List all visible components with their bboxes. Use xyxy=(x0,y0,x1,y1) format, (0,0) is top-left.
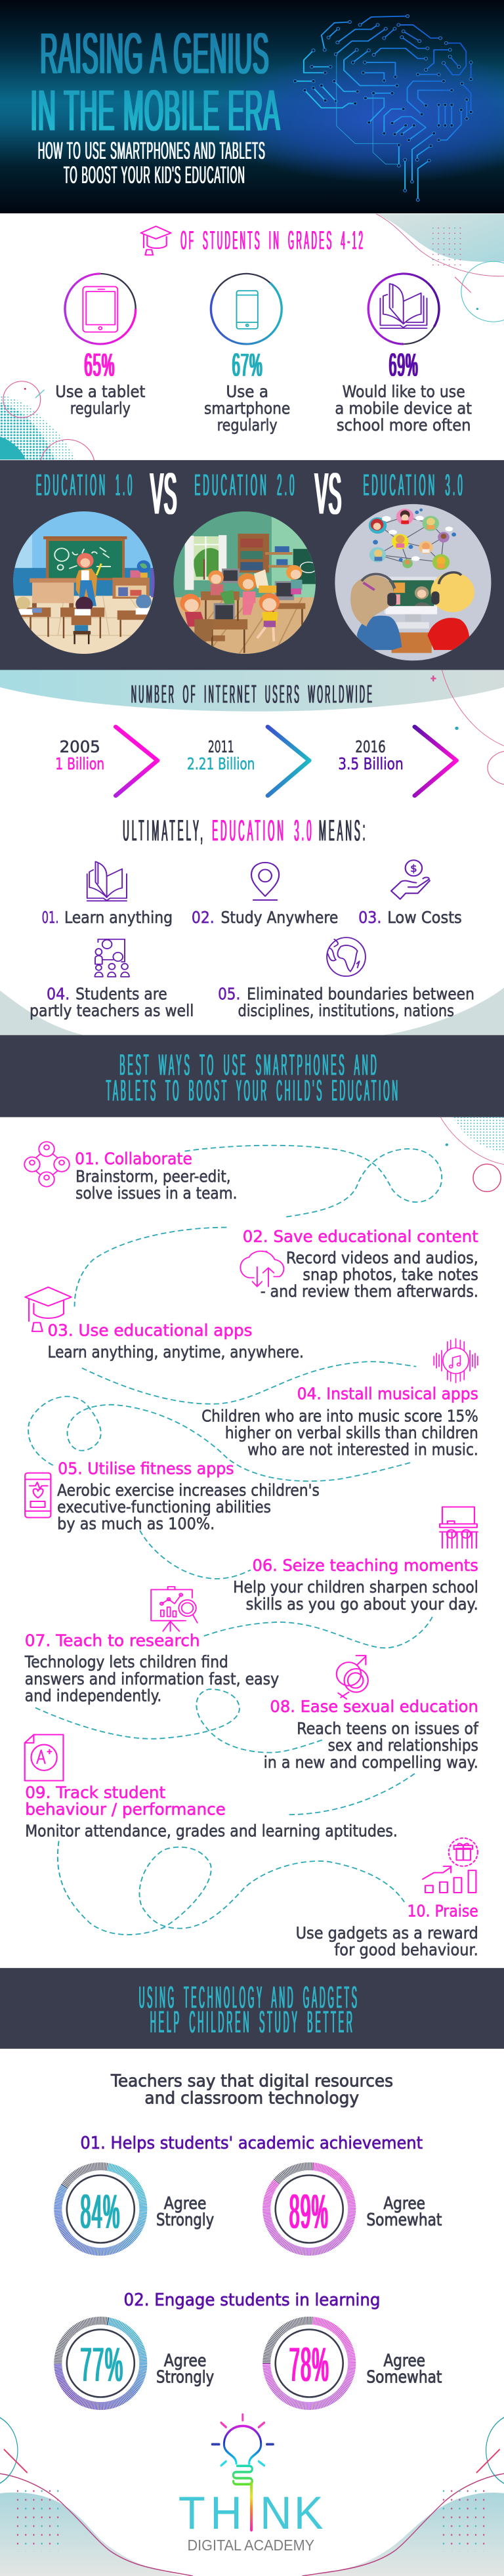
logo: think digital academy: THINK xyxy=(178,2487,324,2539)
panel: teachers survey: 78% xyxy=(289,2337,329,2392)
stat: mobile device 69% xyxy=(335,274,472,435)
stat: smartphone 67%: smartphone xyxy=(204,399,290,418)
stat: 2016: 3.5 Billion xyxy=(338,755,404,774)
panel: number of internet users: MEANS: xyxy=(319,814,368,848)
stat: 2011: 2011 xyxy=(208,738,234,757)
item 04: install musical apps: 04. Install musical apps xyxy=(297,1385,478,1404)
panel: teachers survey xyxy=(80,2071,442,2392)
value: 77%: 77% xyxy=(80,2337,124,2392)
heading: education 1.0 vs 2.0 vs 3.0 xyxy=(36,462,465,526)
stat: tablet 65%: 65% xyxy=(84,347,115,383)
icon: circuit brain xyxy=(295,16,471,200)
item: students are teachers: Students are xyxy=(75,985,167,1004)
item 09: track student behaviour: Monitor attendance, grades and learning aptitudes. xyxy=(25,1822,398,1841)
dashed path connectors xyxy=(28,1146,442,1481)
item 08: ease sexual education xyxy=(264,1656,478,1772)
item 03: use educational apps: 03. Use educational apps xyxy=(47,1321,252,1340)
stat: mobile device 69%: a mobile device at xyxy=(335,399,472,418)
item 09: track student behaviour: behaviour / performance xyxy=(25,1800,226,1819)
title xyxy=(31,21,280,143)
icon: cloud sync xyxy=(240,1251,284,1287)
item 06: seize teaching moments xyxy=(233,1507,478,1614)
icon: smartphone xyxy=(236,291,258,329)
heading: education 1.0 vs 2.0 vs 3.0: VS xyxy=(315,462,342,526)
item 10: praise: 10. Praise xyxy=(408,1902,478,1921)
labels: agree strongly 84 xyxy=(156,2193,214,2229)
item: students are teachers xyxy=(30,939,194,1021)
text: teachers say: and classroom technology xyxy=(144,2088,359,2108)
item: eliminated boundaries: 05. xyxy=(218,985,240,1004)
heading: best ways xyxy=(106,1048,400,1107)
item 07: teach to research: Technology lets children find xyxy=(24,1653,228,1672)
item 02: save educational content xyxy=(240,1228,478,1301)
item: eliminated boundaries xyxy=(218,937,474,1021)
stat: mobile device 69%: school more often xyxy=(337,416,471,435)
heading: academic achievement: 01. Helps students' academic achievement xyxy=(80,2133,423,2153)
panel: teachers survey: 89% xyxy=(289,2185,329,2239)
arrow: chevron 2 xyxy=(268,727,309,796)
item 01: collaborate: Brainstorm, peer-edit, xyxy=(75,1168,231,1186)
item: study anywhere: 02. xyxy=(192,909,215,928)
stat: 2005 xyxy=(55,738,104,774)
subtitle xyxy=(38,138,266,189)
stat: 2011 xyxy=(187,738,255,774)
icon: graduation cap xyxy=(141,226,171,255)
ring: 77 percent xyxy=(58,2321,143,2406)
labels: agree strongly 77 xyxy=(156,2350,214,2387)
item 01: collaborate: solve issues in a team. xyxy=(75,1184,237,1203)
text: teachers say: Teachers say that digital resources xyxy=(110,2071,393,2091)
item: students are teachers: partly teachers as well xyxy=(30,1002,194,1021)
icon: classroom board xyxy=(440,1507,478,1548)
icon: gift and growth chart xyxy=(423,1838,478,1893)
ring: 78 percent xyxy=(266,2321,352,2406)
icon: open book xyxy=(380,284,427,328)
labels: agree somewhat 89: Agree xyxy=(383,2193,425,2214)
panel: students in grades 4-12 xyxy=(0,214,504,492)
item 03: use educational apps xyxy=(25,1287,304,1362)
stat: 2005: 1 Billion xyxy=(55,755,104,774)
item 09: track student behaviour xyxy=(25,1734,398,1841)
heading: ultimately, education 3.0 means: ULTIMATELY, xyxy=(123,814,205,848)
item 05: utilise fitness apps: by as much as 100%. xyxy=(57,1515,215,1534)
item: study anywhere: Study Anywhere xyxy=(220,909,338,928)
labels: agree strongly 84: Agree xyxy=(164,2193,206,2214)
panel: number of internet users xyxy=(0,670,504,1035)
illustration: computer classroom xyxy=(173,509,319,656)
labels: agree strongly 77: Agree xyxy=(164,2350,206,2371)
item 09: track student behaviour: 09. Track student xyxy=(25,1784,165,1802)
item: low costs: $ xyxy=(410,863,417,874)
item 08: ease sexual education: 08. Ease sexual education xyxy=(270,1698,478,1717)
item 07: teach to research xyxy=(24,1587,279,1706)
labels: agree strongly 84: Strongly xyxy=(156,2209,214,2229)
labels: agree somewhat 78: Agree xyxy=(383,2350,425,2371)
stat: tablet 65%: Use a tablet xyxy=(55,383,145,402)
illustration: online learning network xyxy=(334,504,492,662)
item 07: teach to research: answers and information fast, easy xyxy=(25,1670,279,1689)
panel: technology heading band xyxy=(0,1968,504,2049)
stat: smartphone 67%: 67% xyxy=(232,347,263,383)
icon: collaboration circle xyxy=(24,1142,70,1187)
item: learn anything xyxy=(42,861,173,928)
item 05: utilise fitness apps: 05. Utilise fitness apps xyxy=(58,1460,234,1478)
labels: agree somewhat 78 xyxy=(366,2350,442,2387)
stat: tablet 65%: regularly xyxy=(70,399,131,418)
item 04: install musical apps xyxy=(201,1339,478,1459)
logo: think digital academy: DIGITAL ACADEMY xyxy=(188,2537,314,2554)
icon: hand with coin xyxy=(391,860,430,899)
item: low costs xyxy=(358,860,462,928)
icon: map pin xyxy=(251,863,279,900)
stat: tablet 65% xyxy=(55,274,145,418)
icon: research chart xyxy=(151,1587,198,1631)
labels: agree strongly 77: Strongly xyxy=(156,2367,214,2387)
item 10: praise xyxy=(296,1838,478,1960)
stat: 2005: 2005 xyxy=(60,738,100,757)
icon: A+ paper xyxy=(25,1734,63,1780)
panel: ten best ways part one xyxy=(24,1117,504,1534)
item: learn anything: Learn anything xyxy=(64,909,173,928)
stat: mobile device 69%: Would like to use xyxy=(343,383,465,402)
item 03: use educational apps: Learn anything, anytime, anywhere. xyxy=(47,1343,304,1362)
text: teachers say xyxy=(110,2071,393,2108)
heading: using technology and gadgets xyxy=(139,1981,360,2040)
stat: 2016 xyxy=(338,738,404,774)
arrow: chevron 1 xyxy=(116,727,158,796)
stat: mobile device 69%: 69% xyxy=(389,347,419,383)
item 01: collaborate xyxy=(24,1142,237,1203)
icon: light bulb xyxy=(212,2415,273,2530)
icon: music wave xyxy=(434,1339,478,1383)
item: learn anything: 01. xyxy=(42,909,59,928)
item 05: utilise fitness apps: executive-functioning abilities xyxy=(57,1498,271,1517)
labels: agree somewhat 78: Somewhat xyxy=(366,2367,442,2387)
item 01: collaborate: 01. Collaborate xyxy=(75,1150,192,1169)
item 07: teach to research: and independently. xyxy=(25,1687,161,1706)
item 07: teach to research: 07. Teach to research xyxy=(25,1632,200,1650)
icon: globe xyxy=(327,937,366,976)
logo: think digital academy xyxy=(178,2415,324,2554)
heading: education 1.0 vs 2.0 vs 3.0: VS xyxy=(150,462,177,526)
illustration: traditional classroom xyxy=(13,509,158,657)
icon: teacher and students xyxy=(94,939,129,977)
labels: agree somewhat 89: Somewhat xyxy=(366,2209,442,2229)
icon: gender symbols xyxy=(337,1656,368,1699)
dashed path connectors xyxy=(35,1530,432,1935)
labels: agree somewhat 89 xyxy=(366,2193,442,2229)
stat: 2016: 2016 xyxy=(355,738,386,757)
stat: 2011: 2.21 Billion xyxy=(187,755,255,774)
icon: tablet xyxy=(83,287,117,332)
item 05: utilise fitness apps xyxy=(25,1460,320,1534)
icon: open book xyxy=(87,861,127,901)
stat: smartphone 67%: regularly xyxy=(217,416,278,435)
item 02: save educational content: 02. Save educational content xyxy=(243,1228,478,1247)
panel: best ways heading band xyxy=(0,1035,504,1117)
item 06: seize teaching moments: 06. Seize teaching moments xyxy=(252,1556,478,1576)
stat: smartphone 67%: Use a xyxy=(226,383,268,402)
item: low costs: Low Costs xyxy=(387,909,462,928)
header panel xyxy=(0,0,504,213)
panel: ten best ways part two xyxy=(24,1507,478,1960)
arrow: chevron 3 xyxy=(415,727,457,796)
ring: 84 percent xyxy=(58,2166,143,2252)
item: students are teachers: 04. xyxy=(47,985,70,1004)
footer with logo xyxy=(0,2414,504,2576)
icon: graduation cap xyxy=(25,1287,72,1331)
heading: engage students: 02. Engage students in learning xyxy=(124,2290,380,2310)
panel: education comparison xyxy=(0,460,504,670)
ring: 89 percent xyxy=(266,2166,352,2252)
panel: teachers survey: 84% xyxy=(80,2185,121,2239)
icon: fitness phone xyxy=(25,1473,51,1518)
stat: smartphone 67% xyxy=(204,274,290,435)
heading: education 1.0 vs 2.0 vs 3.0: EDUCATION 1.0 xyxy=(36,468,135,502)
item: study anywhere xyxy=(192,863,338,928)
item 05: utilise fitness apps: Aerobic exercise increases children's xyxy=(57,1482,320,1500)
item: low costs: 03. xyxy=(358,909,381,928)
